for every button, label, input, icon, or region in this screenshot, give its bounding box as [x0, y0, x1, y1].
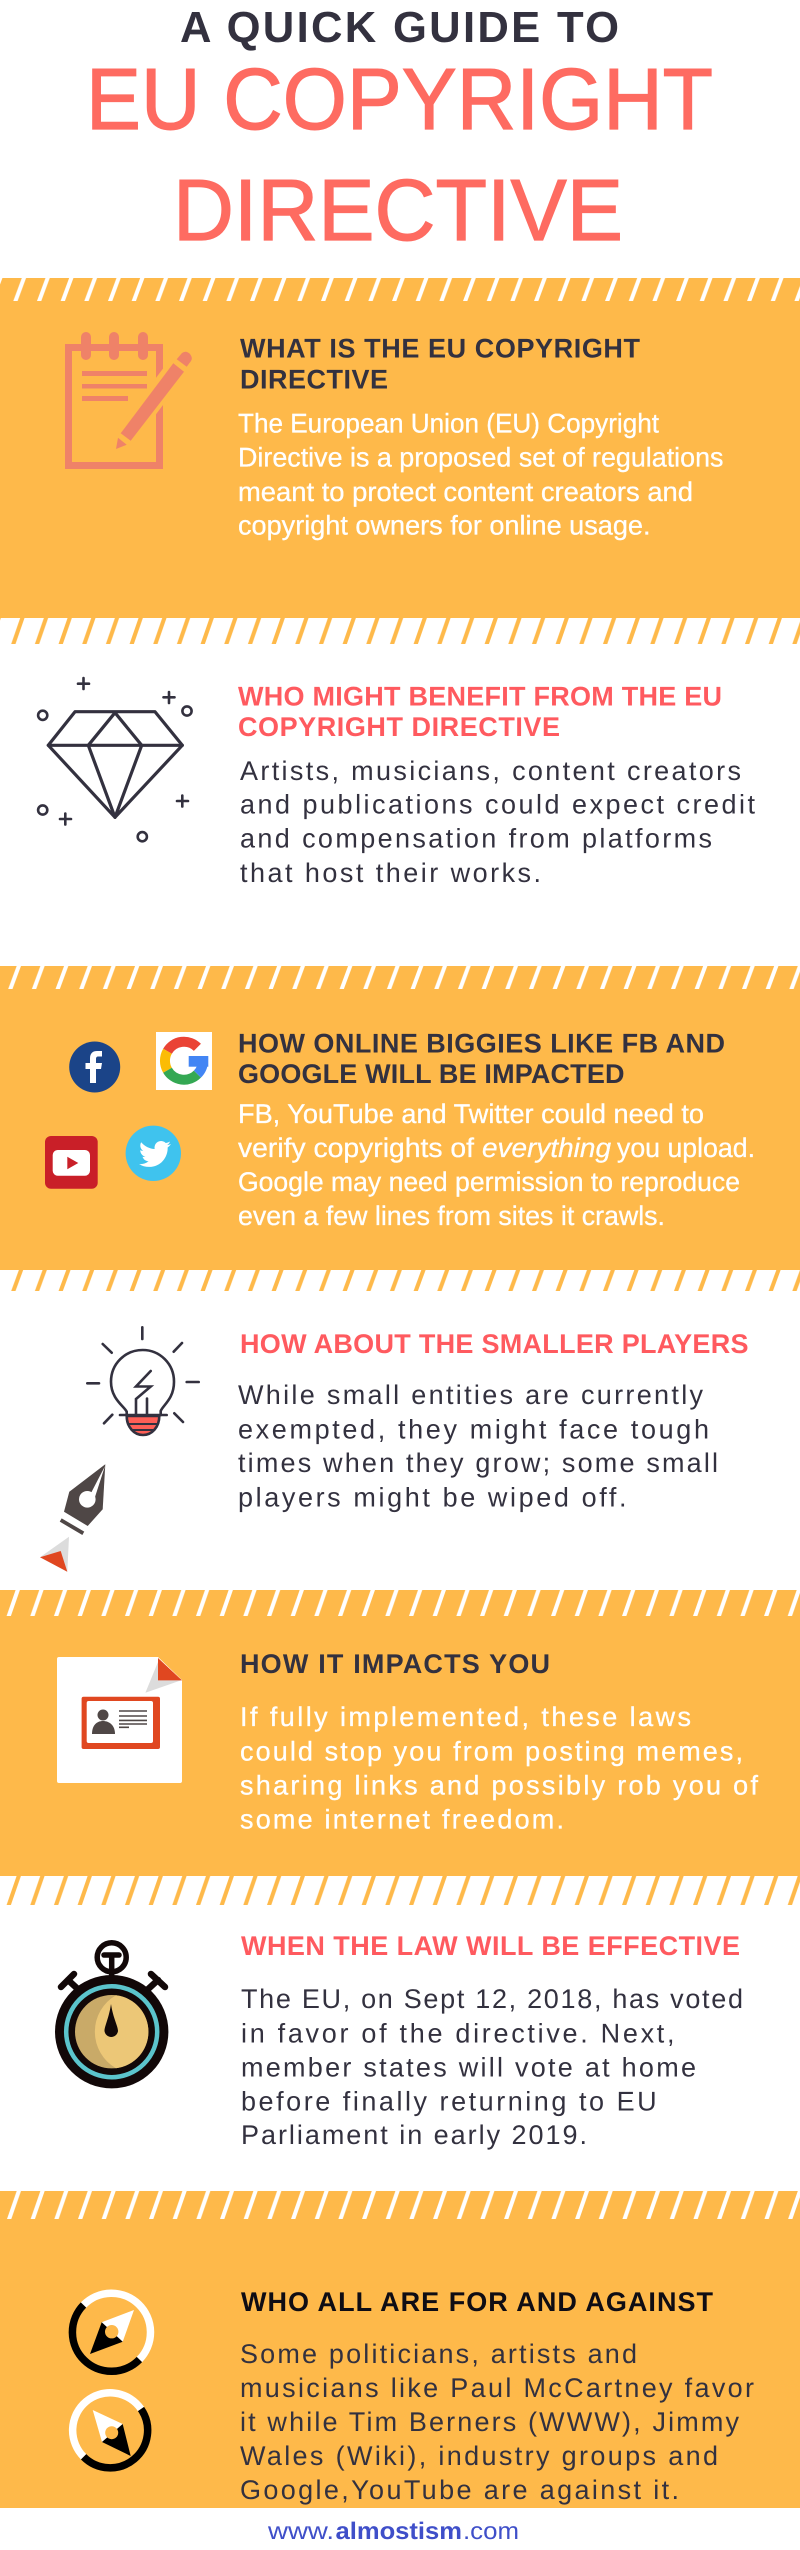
body text [238, 409, 724, 541]
body text: copyright owners for online usage. [238, 511, 650, 541]
body text [241, 1984, 743, 2150]
panel: how it impacts you [0, 1590, 800, 1876]
body text: you upload. [617, 1133, 755, 1163]
heading [238, 1029, 725, 1089]
panel: online biggies [0, 966, 800, 1270]
body text: member states will vote at home [241, 2053, 696, 2083]
icon: youtube [45, 1136, 98, 1189]
body text: and compensation from platforms [240, 824, 712, 854]
body text: The European Union (EU) Copyright [238, 409, 659, 439]
body text: that host their works. [240, 858, 541, 888]
body text [240, 2339, 754, 2505]
body text: While small entities are currently [238, 1380, 704, 1410]
body text: some internet freedom. [240, 1805, 564, 1835]
panel: when effective [0, 1876, 800, 2150]
heading: HOW ONLINE BIGGIES LIKE FB AND [238, 1029, 725, 1059]
heading: WHO ALL ARE FOR AND AGAINST [241, 2287, 714, 2317]
body text: Google may need permission to reproduce [238, 1167, 740, 1197]
body text: exempted, they might face tough [238, 1414, 709, 1444]
heading: COPYRIGHT DIRECTIVE [238, 712, 560, 742]
heading: HOW ABOUT THE SMALLER PLAYERS [240, 1329, 748, 1359]
heading [238, 682, 722, 742]
title line: directive: DIRECTIVE [173, 162, 623, 259]
body text: even a few lines from sites it crawls. [238, 1201, 665, 1231]
panel: who might benefit [0, 618, 800, 888]
heading: HOW IT IMPACTS YOU [240, 1649, 550, 1679]
panel: what is the directive [0, 278, 800, 618]
heading [240, 334, 640, 394]
body text: and publications could expect credit [240, 790, 755, 820]
icon: twitter [126, 1126, 181, 1181]
icon: stopwatch [55, 1943, 168, 2088]
title line: a quick guide to: A QUICK GUIDE TO [180, 4, 619, 52]
body text: Wales (Wiki), industry groups and [240, 2441, 718, 2471]
body text: FB, YouTube and Twitter could need to [238, 1099, 704, 1129]
icon: compass two [73, 2393, 148, 2468]
body text: it while Tim Berners (WWW), Jimmy [240, 2407, 740, 2437]
heading: WHEN THE LAW WILL BE EFFECTIVE [241, 1931, 740, 1961]
body text: The EU, on Sept 12, 2018, has voted [241, 1984, 743, 2014]
icon: notepad and pencil [68, 332, 192, 466]
heading: GOOGLE WILL BE IMPACTED [238, 1059, 624, 1089]
body text: sharing links and possibly rob you of [240, 1771, 758, 1801]
title [86, 4, 713, 259]
icon: diamond with sparkles [38, 678, 192, 841]
footer website link: www. [267, 2518, 334, 2545]
body text [238, 1380, 718, 1512]
icon: pen nib rocket [40, 1464, 105, 1572]
body text: If fully implemented, these laws [240, 1702, 691, 1732]
title line: eu copyright: EU COPYRIGHT [86, 51, 713, 148]
icon: light bulb [87, 1327, 199, 1435]
icon: google [156, 1032, 212, 1090]
heading: WHAT IS THE EU COPYRIGHT [240, 334, 640, 364]
body text: everything [482, 1133, 611, 1163]
body text: Google,YouTube are against it. [240, 2475, 679, 2505]
panel: for and against [0, 2191, 800, 2508]
body text: before finally returning to EU [241, 2086, 657, 2116]
body text: times when they grow; some small [238, 1448, 718, 1478]
footer website link: .com [463, 2518, 519, 2545]
body text: musicians like Paul McCartney favor [240, 2373, 754, 2403]
body text: Directive is a proposed set of regulations [238, 442, 724, 472]
body text [238, 1099, 755, 1231]
body text: Parliament in early 2019. [241, 2120, 587, 2150]
body text: players might be wiped off. [238, 1482, 626, 1512]
body text: verify copyrights of [238, 1133, 475, 1163]
heading: WHO MIGHT BENEFIT FROM THE EU [238, 682, 722, 712]
panel: smaller players [0, 1270, 800, 1572]
body text: in favor of the directive. Next, [241, 2018, 674, 2048]
heading: DIRECTIVE [240, 364, 388, 394]
body text [240, 1702, 758, 1835]
body text [240, 756, 755, 888]
body text: could stop you from posting memes, [240, 1736, 743, 1766]
body text: Some politicians, artists and [240, 2339, 637, 2369]
body text: Artists, musicians, content creators [240, 756, 741, 786]
body text: meant to protect content creators and [238, 477, 693, 507]
icon: facebook [69, 1042, 120, 1092]
icon: compass one [72, 2293, 150, 2371]
icon: id card document [57, 1657, 182, 1783]
footer website link: almostism [336, 2518, 462, 2545]
